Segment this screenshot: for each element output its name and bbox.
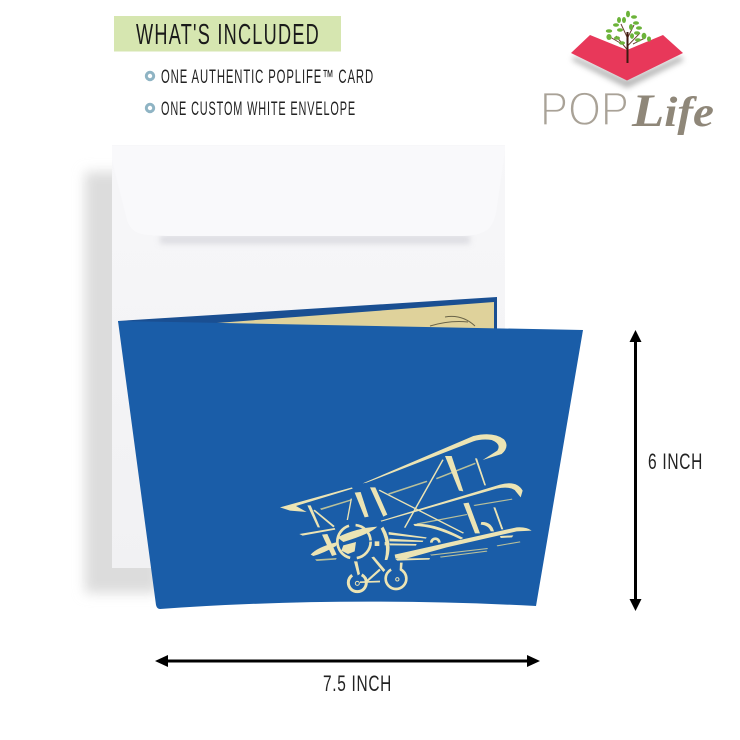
bullet: card bbox=[146, 72, 154, 80]
bullet: envelope bbox=[146, 104, 154, 112]
heading: what's included bbox=[114, 16, 341, 52]
logo shadow bbox=[572, 56, 684, 88]
envelope bbox=[112, 145, 505, 568]
upper wing bbox=[363, 434, 507, 483]
arrow: width bbox=[155, 655, 540, 667]
logo: tree bbox=[606, 11, 651, 63]
envelope shadow bbox=[85, 172, 159, 593]
logo: red book bbox=[571, 35, 683, 80]
logo: PopLife bbox=[540, 11, 714, 137]
logo: wordmark bbox=[540, 82, 714, 137]
undercarriage bbox=[354, 561, 360, 575]
inner plane peek bbox=[430, 316, 475, 326]
text: envelope item: ONE CUSTOM WHITE ENVELOPE bbox=[161, 99, 356, 120]
card: blue front bbox=[118, 321, 583, 609]
card: inside back panel bbox=[118, 297, 497, 336]
flap shadow bbox=[160, 235, 470, 244]
label: 7.5 inch: 7.5 INCH bbox=[323, 671, 392, 696]
tail / fuselage lower wing bbox=[395, 527, 532, 559]
heading: what's included: WHAT'S INCLUDED bbox=[136, 19, 320, 51]
propeller bbox=[337, 527, 377, 542]
struts bbox=[445, 456, 463, 491]
engine cowl bbox=[381, 527, 390, 560]
label: 6 inch: 6 INCH bbox=[648, 449, 703, 474]
biplane engine ring and wheels bbox=[337, 525, 406, 592]
arrow: height bbox=[630, 330, 642, 611]
cross wires bbox=[379, 490, 464, 534]
logo: wordmark: Life bbox=[631, 85, 714, 137]
envelope body bbox=[112, 145, 505, 568]
logo: wordmark: POP bbox=[540, 82, 629, 135]
biplane cutout bbox=[280, 434, 532, 583]
list: included items bbox=[146, 67, 374, 120]
envelope flap bbox=[112, 146, 505, 236]
text: card item: ONE AUTHENTIC POPLIFE™ CARD bbox=[161, 67, 374, 88]
lower wing bbox=[381, 483, 523, 522]
